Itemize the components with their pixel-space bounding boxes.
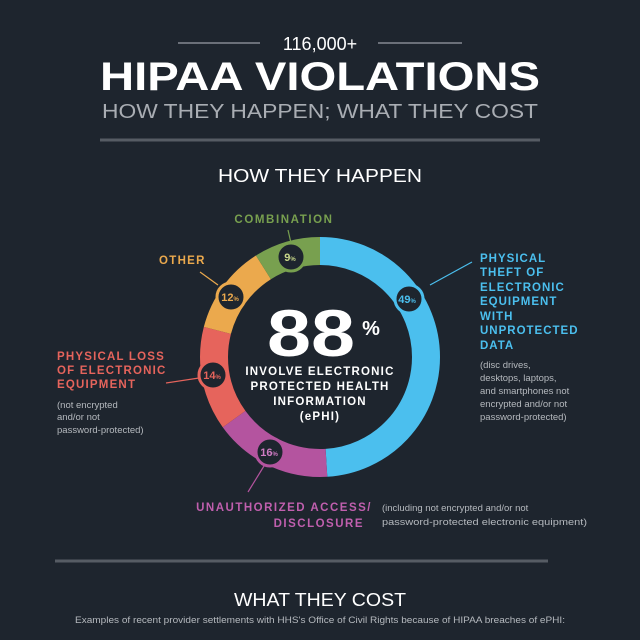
badges: 16%	[260, 447, 278, 459]
center stat: %	[362, 318, 380, 340]
label: physical loss: OF ELECTRONIC	[57, 365, 167, 377]
label: physical theft: and smartphones not	[480, 386, 570, 397]
label: physical theft: (disc drives,	[480, 360, 531, 371]
badges: 12%	[221, 292, 239, 304]
label: physical loss: (not encrypted	[57, 400, 118, 411]
heading: how they happen: HOW THEY HAPPEN	[218, 166, 422, 186]
label: physical theft: UNPROTECTED	[480, 325, 579, 337]
label: other: OTHER	[159, 255, 206, 267]
label: unauthorized access: password-protected electronic equipment)	[382, 517, 587, 528]
label: physical theft: encrypted and/or not	[480, 399, 568, 410]
donut chart	[214, 251, 426, 463]
intro text: Examples of recent provider settlements with HHS's Office of Civil Rights because of HIPAA breaches of ePHI:	[75, 615, 565, 625]
center stat: PROTECTED HEALTH	[250, 381, 390, 393]
badges	[199, 243, 423, 466]
label: unauthorized access: DISCLOSURE	[274, 518, 364, 530]
label: physical theft: password-protected)	[480, 412, 567, 423]
leader lines	[166, 230, 472, 492]
label: unauthorized access: (including not encrypted and/or not	[382, 503, 529, 514]
center stat: INVOLVE ELECTRONIC	[245, 366, 395, 378]
label: physical loss	[57, 351, 167, 436]
label: physical theft: DATA	[480, 340, 514, 352]
label: physical theft: desktops, laptops,	[480, 373, 557, 384]
label: combination: COMBINATION	[234, 214, 334, 226]
label: physical theft: ELECTRONIC	[480, 282, 565, 294]
count: 116,000+	[283, 34, 357, 54]
badges: 9%	[284, 252, 296, 264]
label: physical loss: and/or not	[57, 412, 100, 423]
center stat: (ePHI)	[300, 411, 340, 423]
label: physical loss: PHYSICAL LOSS	[57, 351, 165, 363]
label: unauthorized access	[196, 502, 587, 530]
center stat	[245, 296, 395, 423]
subtitle: HOW THEY HAPPEN; WHAT THEY COST	[102, 101, 538, 123]
label: physical loss: password-protected)	[57, 425, 144, 436]
title: HIPAA VIOLATIONS	[100, 55, 540, 99]
label: physical theft: WITH	[480, 311, 513, 323]
center stat: 88	[267, 296, 355, 370]
label: physical theft	[480, 253, 579, 423]
badges: 14%	[203, 370, 221, 382]
center stat: INFORMATION	[273, 396, 367, 408]
heading: what they cost: WHAT THEY COST	[234, 590, 406, 610]
label: physical theft: EQUIPMENT	[480, 296, 557, 308]
label: physical loss: EQUIPMENT	[57, 379, 136, 391]
label: physical theft: THEFT OF	[480, 267, 544, 279]
header	[100, 34, 540, 123]
badges: 49%	[398, 294, 416, 306]
label: physical theft: PHYSICAL	[480, 253, 546, 265]
label: unauthorized access: UNAUTHORIZED ACCESS/	[196, 502, 372, 514]
